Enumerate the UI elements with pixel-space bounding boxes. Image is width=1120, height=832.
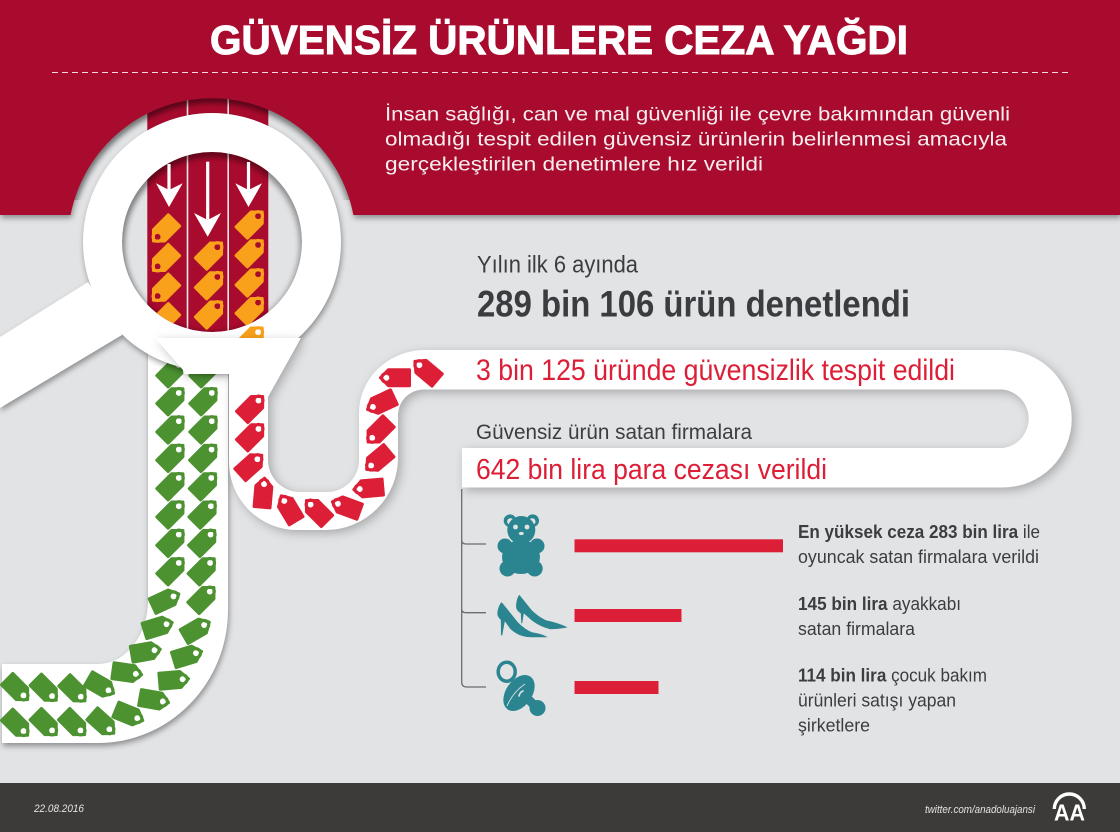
twitter handle: twitter.com/anadoluajansi <box>925 804 1035 816</box>
date: 22.08.2016 <box>33 803 85 815</box>
bar: toys <box>574 539 783 552</box>
green safe product tags <box>1 355 222 741</box>
intro text: gerçekleştirilen denetimlere hız verildi <box>385 154 763 176</box>
text: unsafe sellers: Güvensiz ürün satan firmalara <box>476 421 752 444</box>
orange tag leaving the lens <box>236 322 268 354</box>
intro text <box>385 102 1010 176</box>
magnifier: ring and handle <box>0 113 341 408</box>
text: childcare fine: şirketlere <box>798 714 870 736</box>
callout: total fine: 642 bin lira para cezası verildi <box>476 454 827 486</box>
text: toy fine: En yüksek ceza 283 bin lira ile <box>798 521 1040 542</box>
icon: pacifier <box>497 662 546 717</box>
icon: teddy bear <box>498 514 544 576</box>
text: shoe fine <box>798 593 961 639</box>
panel: red header band <box>0 0 1120 215</box>
green road <box>2 350 228 743</box>
heading: inspected total: 289 bin 106 ürün denetlendi <box>477 284 910 324</box>
bar: childcare <box>574 681 658 694</box>
red unsafe product tags <box>235 355 442 527</box>
bar: shoes <box>574 609 682 622</box>
text: toy fine: oyuncak satan firmalara verildi <box>798 546 1039 567</box>
arrows pointing down <box>156 162 262 237</box>
text: shoe fine: satan firmalara <box>798 618 916 639</box>
icon: AA logo: AA <box>1054 800 1085 826</box>
red road with funnel <box>155 338 1072 530</box>
tree connector <box>462 489 486 687</box>
orange inspected product tags in lens <box>152 210 264 330</box>
intro text: İnsan sağlığı, can ve mal güvenliği ile çevre bakımından güvenli <box>385 102 1010 126</box>
heading: first six months: Yılın ilk 6 ayında <box>477 252 638 278</box>
title: GÜVENSİZ ÜRÜNLERE CEZA YAĞDI <box>210 17 908 63</box>
footer bar <box>0 783 1120 832</box>
text: childcare fine: 114 bin lira çocuk bakım <box>798 664 987 686</box>
text: toy fine <box>798 521 1040 567</box>
intro text: olmadığı tespit edilen güvensiz ürünlerin belirlenmesi amacıyla <box>385 128 1007 150</box>
text: childcare fine: ürünleri satışı yapan <box>798 690 956 710</box>
conveyor strips behind the magnifier <box>147 90 268 335</box>
icon: high-heeled shoes <box>497 594 568 638</box>
text: childcare fine <box>798 664 987 736</box>
text: shoe fine: 145 bin lira ayakkabı <box>798 593 961 614</box>
callout: unsafe products: 3 bin 125 üründe güvensizlik tespit edildi <box>476 354 955 387</box>
lens inner shadow <box>122 155 302 335</box>
